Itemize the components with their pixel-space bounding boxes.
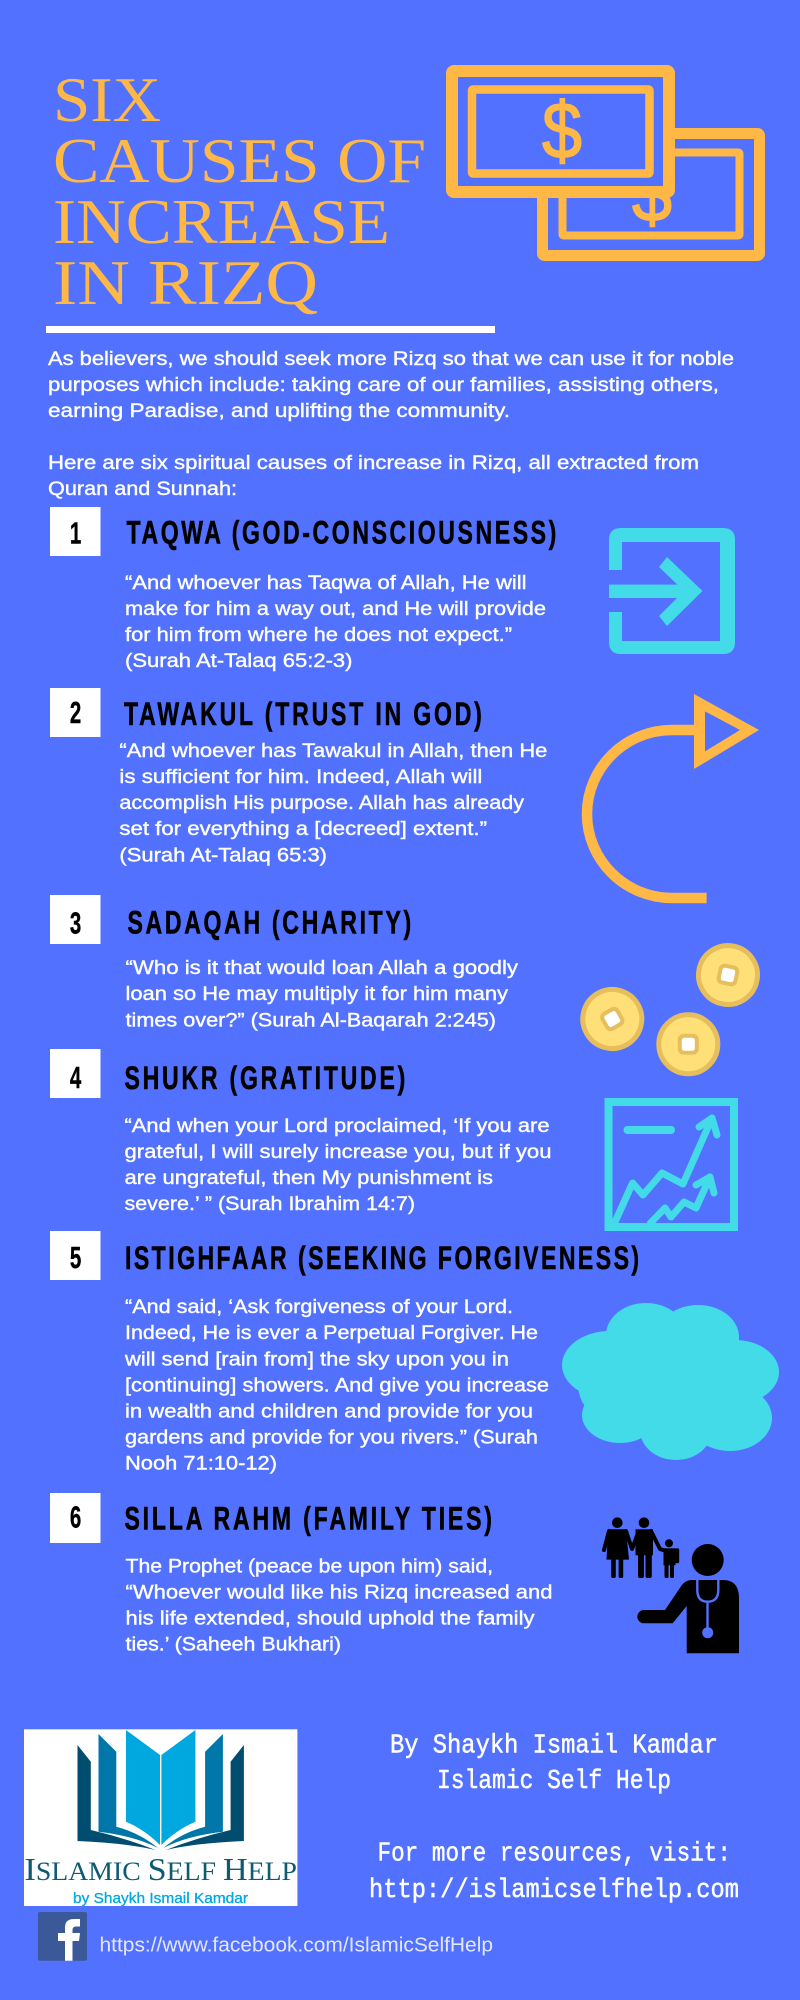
number badge 6: 6 bbox=[70, 1499, 81, 1535]
quote 2: “And whoever has Tawakul in Allah, then He bbox=[119, 740, 547, 762]
quote 1 bbox=[125, 572, 546, 672]
heading 6: SILLA RAHM (FAMILY TIES) bbox=[124, 1501, 492, 1536]
quote 4: are ungrateful, then My punishment is bbox=[124, 1167, 493, 1189]
intro text bbox=[48, 348, 734, 500]
credits text: Islamic Self Help bbox=[437, 1767, 671, 1797]
quote 3: times over?” (Surah Al-Baqarah 2:245) bbox=[126, 1009, 496, 1031]
quote 3: loan so He may multiply it for him many bbox=[126, 983, 508, 1005]
quote 6: “Whoever would like his Rizq increased and bbox=[126, 1581, 552, 1603]
quote 2: is sufficient for him. Indeed, Allah will bbox=[119, 766, 482, 788]
title bbox=[53, 65, 426, 318]
heading 1: TAQWA (GOD-CONSCIOUSNESS) bbox=[126, 515, 556, 550]
icon: cloud bbox=[562, 1303, 779, 1460]
family figures bbox=[604, 1517, 679, 1578]
number badge 1: 1 bbox=[70, 515, 81, 551]
icon: family and doctor bbox=[604, 1517, 739, 1653]
quote 6: his life extended, should uphold the family bbox=[126, 1607, 535, 1629]
quote 1: (Surah At-Talaq 65:2-3) bbox=[125, 650, 352, 672]
icon: open book bbox=[78, 1730, 244, 1850]
panel: cause 2 tawakul bbox=[50, 688, 759, 898]
icon: money banknotes: $ bbox=[632, 149, 672, 238]
panel: cause 4 shukr bbox=[50, 1049, 734, 1227]
panel: cause 3 sadaqah bbox=[50, 895, 763, 1074]
icon: rising chart bbox=[608, 1102, 734, 1227]
intro text: purposes which include: taking care of our families, assisting others, bbox=[48, 374, 719, 396]
credits text: By Shaykh Ismail Kamdar bbox=[390, 1732, 718, 1762]
quote 5: [continuing] showers. And give you increase bbox=[125, 1374, 549, 1396]
quote 5: gardens and provide for you rivers.” (Surah bbox=[125, 1426, 538, 1448]
heading 4: SHUKR (GRATITUDE) bbox=[124, 1060, 405, 1096]
intro text: As believers, we should seek more Rizq so that we can use it for noble bbox=[48, 348, 734, 370]
quote 3: “Who is it that would loan Allah a goodly bbox=[126, 957, 518, 979]
number badge 2: 2 bbox=[70, 695, 81, 730]
quote 4: grateful, I will surely increase you, but if you bbox=[124, 1141, 552, 1163]
panel: cause 1 taqwa bbox=[50, 507, 735, 672]
quote 5: in wealth and children and provide for you bbox=[125, 1400, 533, 1422]
quote 2 bbox=[119, 740, 547, 866]
quote 1: “And whoever has Taqwa of Allah, He will bbox=[125, 572, 526, 594]
quote 5: Nooh 71:10-12) bbox=[125, 1452, 277, 1474]
quote 1: make for him a way out, and He will provide bbox=[125, 598, 546, 620]
credits text bbox=[369, 1732, 739, 1906]
quote 4: “And when your Lord proclaimed, ‘If you are bbox=[124, 1115, 550, 1137]
intro text: Quran and Sunnah: bbox=[48, 478, 237, 500]
heading 3: SADAQAH (CHARITY) bbox=[128, 905, 411, 940]
quote 6: The Prophet (peace be upon him) said, bbox=[126, 1555, 493, 1577]
icon: facebook bbox=[38, 1912, 87, 1961]
facebook url: https://www.facebook.com/IslamicSelfHelp bbox=[100, 1935, 493, 1957]
quote 4: severe.’ ” (Surah Ibrahim 14:7) bbox=[124, 1193, 415, 1215]
credits text: For more resources, visit: bbox=[378, 1840, 731, 1870]
quote 6: ties.’ (Saheeh Bukhari) bbox=[126, 1633, 341, 1655]
title: CAUSES OF bbox=[53, 126, 426, 196]
quote 2: (Surah At-Talaq 65:3) bbox=[119, 844, 327, 866]
title: IN RIZQ bbox=[53, 248, 318, 318]
quote 5: Indeed, He is ever a Perpetual Forgiver. He bbox=[125, 1322, 538, 1344]
logo: Islamic Self Help bbox=[24, 1729, 297, 1907]
icon: money banknotes: $ bbox=[542, 86, 582, 175]
number badge 4: 4 bbox=[70, 1060, 81, 1095]
quote 2: set for everything a [decreed] extent.” bbox=[119, 818, 487, 840]
icon: money banknotes bbox=[452, 71, 760, 256]
quote 5: will send [rain from] the sky upon you in bbox=[124, 1348, 509, 1370]
quote 5: “And said, ‘Ask forgiveness of your Lord. bbox=[125, 1296, 513, 1318]
quote 5 bbox=[124, 1296, 549, 1474]
icon: curved arrow bbox=[587, 694, 759, 898]
intro text: earning Paradise, and uplifting the community. bbox=[48, 400, 510, 422]
number badge 2 bbox=[50, 688, 100, 737]
number badge 3: 3 bbox=[70, 905, 81, 941]
doctor figure bbox=[637, 1544, 739, 1653]
title: SIX bbox=[53, 65, 161, 135]
panel: cause 5 istighfaar bbox=[50, 1231, 779, 1474]
panel: cause 6 silla rahm bbox=[50, 1493, 739, 1655]
quote 2: accomplish His purpose. Allah has already bbox=[119, 792, 524, 814]
quote 3 bbox=[126, 957, 518, 1031]
number badge 6 bbox=[50, 1493, 100, 1543]
quote 6 bbox=[126, 1555, 552, 1655]
quote 4 bbox=[124, 1115, 552, 1215]
icon: exit arrow bbox=[609, 528, 735, 654]
number badge 3 bbox=[50, 895, 100, 944]
logo byline: by Shaykh Ismail Kamdar bbox=[73, 1890, 248, 1907]
number badge 5: 5 bbox=[70, 1240, 81, 1275]
quote 1: for him from where he does not expect.” bbox=[125, 624, 512, 646]
icon: coins bbox=[572, 940, 763, 1074]
number badge 1 bbox=[50, 507, 100, 556]
logo wordmark: ISLAMIC SELF HELP bbox=[24, 1851, 297, 1887]
title: INCREASE bbox=[53, 187, 390, 257]
number badge 5 bbox=[50, 1231, 100, 1280]
heading 2: TAWAKUL (TRUST IN GOD) bbox=[124, 696, 482, 732]
title underline bar bbox=[46, 326, 495, 333]
heading 5: ISTIGHFAAR (SEEKING FORGIVENESS) bbox=[125, 1240, 639, 1276]
credits text: http://islamicselfhelp.com bbox=[369, 1876, 739, 1906]
intro text: Here are six spiritual causes of increase in Rizq, all extracted from bbox=[48, 452, 699, 474]
number badge 4 bbox=[50, 1049, 100, 1098]
